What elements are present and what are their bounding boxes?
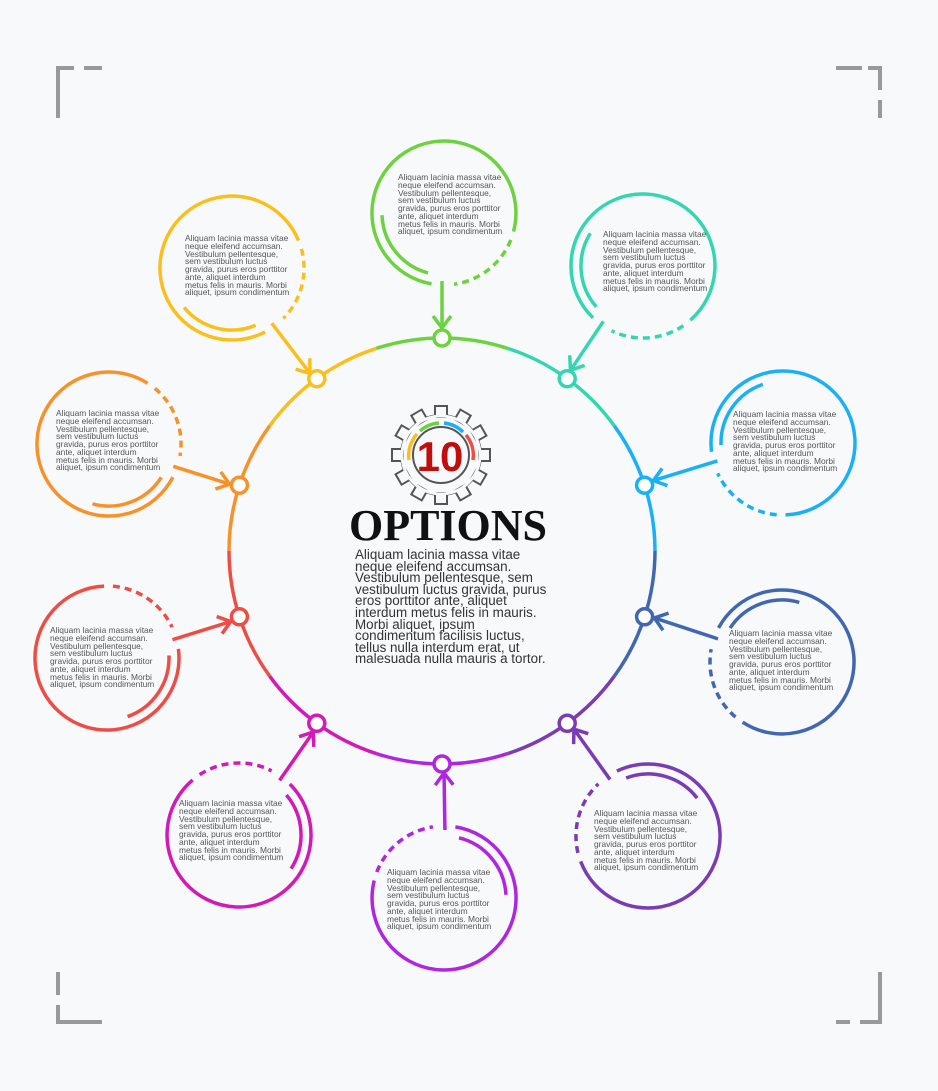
text: purple xyxy=(594,808,698,872)
bubble: teal xyxy=(512,166,743,412)
text: red: sem vestibulum luctus xyxy=(50,648,132,658)
text: magenta: gravida, purus eros porttitor xyxy=(179,829,281,839)
text: yellow: aliquet, ipsum condimentum xyxy=(185,287,289,297)
text: orange: Aliquam lacinia massa vitae xyxy=(56,408,159,418)
text: green: gravida, purus eros porttitor xyxy=(398,203,500,213)
text: teal: gravida, purus eros porttitor xyxy=(603,260,705,270)
text: blue: gravida, purus eros porttitor xyxy=(733,440,835,450)
bubble: yellow xyxy=(131,167,369,416)
central text: interdum metus felis in mauris. xyxy=(355,605,537,620)
text: dark blue: metus felis in mauris. Morbi xyxy=(729,674,831,684)
text: violet: Vestibulum pellentesque, xyxy=(387,882,480,892)
text: dark blue: Vestibulum pellentesque, xyxy=(729,644,822,654)
text: purple: gravida, purus eros porttitor xyxy=(594,839,696,849)
text: yellow: neque eleifend accumsan. xyxy=(185,241,283,251)
bubble: violet xyxy=(370,772,517,971)
text: red: metus felis in mauris. Morbi xyxy=(50,672,152,682)
text: blue: neque eleifend accumsan. xyxy=(733,417,831,427)
text: magenta: metus felis in mauris. Morbi xyxy=(179,844,281,854)
text: magenta: Aliquam lacinia massa vitae xyxy=(179,798,282,808)
bubble: magenta xyxy=(139,690,371,935)
central text: neque eleifend accumsan. xyxy=(355,559,511,574)
icon: gear: 10 xyxy=(417,433,463,480)
text: blue xyxy=(733,409,837,473)
text: teal: Aliquam lacinia massa vitae xyxy=(603,229,706,239)
text: blue: Aliquam lacinia massa vitae xyxy=(733,409,836,419)
text: teal: ante, aliquet interdum xyxy=(603,268,684,278)
central text: tellus nulla interdum erat, ut xyxy=(355,640,520,655)
central text: condimentum facilisis luctus, xyxy=(355,628,525,643)
text: magenta: ante, aliquet interdum xyxy=(179,837,260,847)
text: violet xyxy=(387,867,491,931)
text: teal: metus felis in mauris. Morbi xyxy=(603,276,705,286)
text: red: ante, aliquet interdum xyxy=(50,664,131,674)
text: yellow: gravida, purus eros porttitor xyxy=(185,264,287,274)
text: red: gravida, purus eros porttitor xyxy=(50,656,152,666)
text: dark blue: Aliquam lacinia massa vitae xyxy=(729,628,832,638)
text: red: Aliquam lacinia massa vitae xyxy=(50,625,153,635)
text: teal: aliquet, ipsum condimentum xyxy=(603,283,707,293)
bubble: blue xyxy=(633,353,873,551)
central text: Morbi aliquet, ipsum xyxy=(355,617,475,632)
text: yellow: Aliquam lacinia massa vitae xyxy=(185,233,288,243)
text: orange: Vestibulum pellentesque, xyxy=(56,424,149,434)
text: orange: aliquet, ipsum condimentum xyxy=(56,462,160,472)
central text: Aliquam lacinia massa vitae xyxy=(355,547,520,562)
text: dark blue: aliquet, ipsum condimentum xyxy=(729,682,833,692)
text: yellow: ante, aliquet interdum xyxy=(185,272,266,282)
text: violet: Aliquam lacinia massa vitae xyxy=(387,867,490,877)
bubble: dark blue xyxy=(631,551,873,753)
text: magenta: aliquet, ipsum condimentum xyxy=(179,852,283,862)
text: green: Vestibulum pellentesque, xyxy=(398,188,491,198)
title: OPTIONS xyxy=(349,501,547,550)
main ring xyxy=(229,338,655,764)
text: violet: neque eleifend accumsan. xyxy=(387,875,485,885)
text: blue: aliquet, ipsum condimentum xyxy=(733,463,837,473)
bubble: orange xyxy=(19,354,252,551)
text: magenta: Vestibulum pellentesque, xyxy=(179,814,272,824)
central text: vestibulum luctus gravida, purus xyxy=(355,582,546,597)
text: magenta xyxy=(179,798,283,862)
central text: Vestibulum pellentesque, sem xyxy=(355,570,533,585)
text: teal xyxy=(603,229,707,293)
text: teal: Vestibulum pellentesque, xyxy=(603,244,696,254)
text: purple: sem vestibulum luctus xyxy=(594,831,676,841)
text: violet: ante, aliquet interdum xyxy=(387,906,468,916)
text: red: aliquet, ipsum condimentum xyxy=(50,679,154,689)
text: red: Vestibulum pellentesque, xyxy=(50,640,143,650)
text: dark blue xyxy=(729,628,833,692)
text: green: Aliquam lacinia massa vitae xyxy=(398,172,501,182)
text: magenta: sem vestibulum luctus xyxy=(179,821,261,831)
text: violet: metus felis in mauris. Morbi xyxy=(387,914,489,924)
text: magenta: neque eleifend accumsan. xyxy=(179,806,277,816)
text: yellow: Vestibulum pellentesque, xyxy=(185,248,278,258)
text: violet: aliquet, ipsum condimentum xyxy=(387,921,491,931)
text: yellow: sem vestibulum luctus xyxy=(185,256,267,266)
text: green xyxy=(398,172,502,236)
text: blue: sem vestibulum luctus xyxy=(733,432,815,442)
text: orange xyxy=(56,408,160,472)
text: blue: ante, aliquet interdum xyxy=(733,448,814,458)
text: yellow xyxy=(185,233,289,297)
text: purple: Aliquam lacinia massa vitae xyxy=(594,808,697,818)
text: dark blue: sem vestibulum luctus xyxy=(729,651,811,661)
text: dark blue: ante, aliquet interdum xyxy=(729,667,810,677)
central text xyxy=(355,547,546,666)
text: purple: aliquet, ipsum condimentum xyxy=(594,862,698,872)
text: violet: gravida, purus eros porttitor xyxy=(387,898,489,908)
text: green: neque eleifend accumsan. xyxy=(398,180,496,190)
text: green: aliquet, ipsum condimentum xyxy=(398,226,502,236)
central text: malesuada nulla mauris a tortor. xyxy=(355,651,546,666)
text: purple: metus felis in mauris. Morbi xyxy=(594,854,696,864)
bubble: red xyxy=(17,551,252,748)
bubble: purple xyxy=(514,688,749,936)
text: green: sem vestibulum luctus xyxy=(398,195,480,205)
text: dark blue: neque eleifend accumsan. xyxy=(729,636,827,646)
text: purple: neque eleifend accumsan. xyxy=(594,816,692,826)
nodes xyxy=(231,330,653,772)
text: purple: ante, aliquet interdum xyxy=(594,847,675,857)
text: blue: Vestibulum pellentesque, xyxy=(733,424,826,434)
text: orange: gravida, purus eros porttitor xyxy=(56,439,158,449)
bubble: green xyxy=(372,141,516,328)
text: green: metus felis in mauris. Morbi xyxy=(398,218,500,228)
text: teal: sem vestibulum luctus xyxy=(603,252,685,262)
text: orange: metus felis in mauris. Morbi xyxy=(56,454,158,464)
text: orange: sem vestibulum luctus xyxy=(56,431,138,441)
text: orange: neque eleifend accumsan. xyxy=(56,416,154,426)
text: teal: neque eleifend accumsan. xyxy=(603,237,701,247)
text: red xyxy=(50,625,154,689)
text: orange: ante, aliquet interdum xyxy=(56,447,137,457)
icon: gear xyxy=(392,406,490,504)
text: green: ante, aliquet interdum xyxy=(398,211,479,221)
text: dark blue: gravida, purus eros porttitor xyxy=(729,659,831,669)
central text: eros porttitor ante, aliquet xyxy=(355,593,507,608)
text: yellow: metus felis in mauris. Morbi xyxy=(185,280,287,290)
text: blue: metus felis in mauris. Morbi xyxy=(733,456,835,466)
text: red: neque eleifend accumsan. xyxy=(50,633,148,643)
text: violet: sem vestibulum luctus xyxy=(387,890,469,900)
text: purple: Vestibulum pellentesque, xyxy=(594,824,687,834)
